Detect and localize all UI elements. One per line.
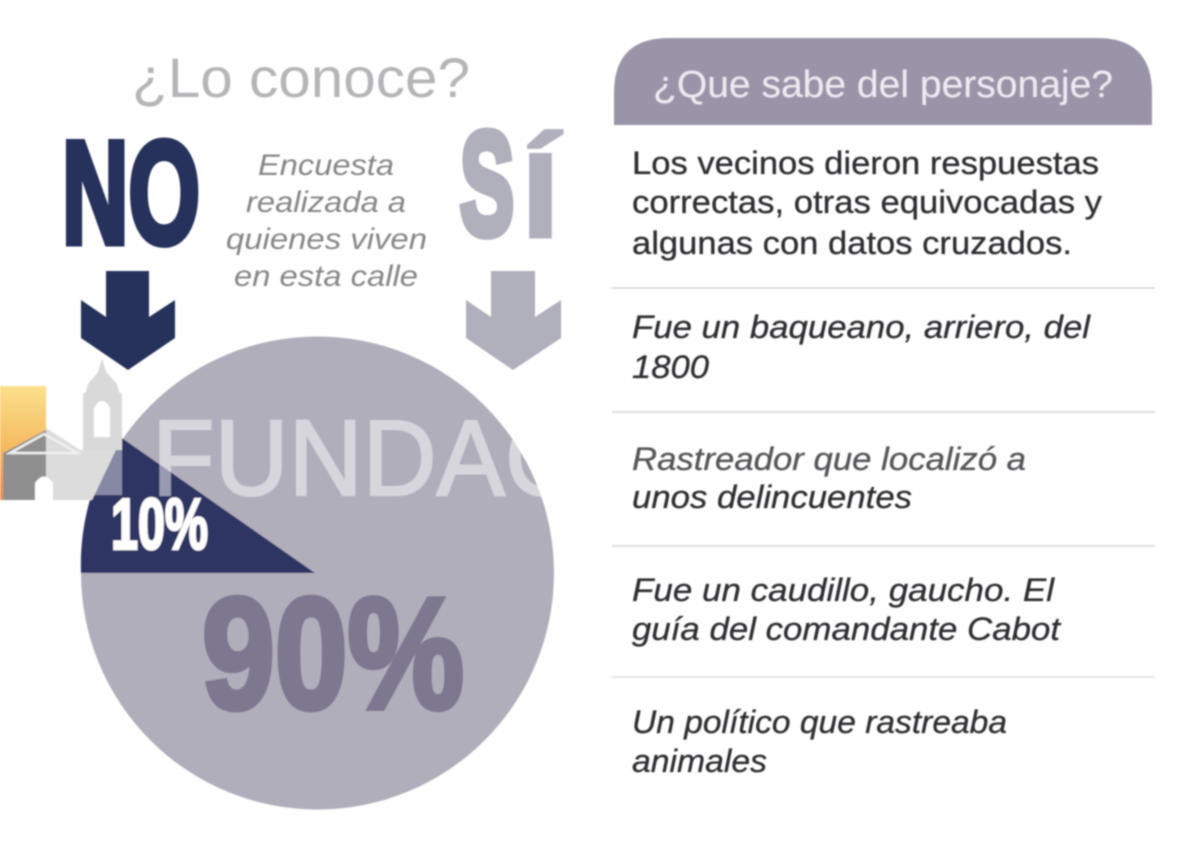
- logo wing over slice: [94, 450, 122, 495]
- logo roof line: [10, 434, 78, 453]
- answer 1: 1800: [632, 349, 709, 385]
- answer 3: [632, 572, 1061, 647]
- label: SÍ: S: [460, 102, 514, 265]
- pie chart: [81, 336, 554, 810]
- survey note: [226, 149, 427, 293]
- answer 4: Un político que rastreaba: [632, 704, 1007, 740]
- intro text: [632, 145, 1102, 261]
- logo tower: [83, 358, 122, 450]
- intro text: correctas, otras equivocadas y: [632, 184, 1102, 220]
- value: 90%: 90%: [202, 566, 464, 742]
- arrow: NO: [81, 271, 175, 370]
- arrow: SÍ: [466, 271, 561, 370]
- pie slice: 10%: [81, 436, 315, 573]
- intro text: Los vecinos dieron respuestas: [632, 145, 1099, 181]
- survey note: quienes viven: [226, 223, 427, 256]
- answer 2: unos delincuentes: [632, 479, 912, 515]
- answer 1: [632, 309, 1091, 385]
- survey panel: [0, 46, 579, 810]
- answer 3: Fue un caudillo, gaucho. El: [632, 572, 1055, 608]
- logo church wing: [46, 428, 116, 500]
- answer 4: [632, 704, 1007, 779]
- answer 2: Rastreador que localizó a: [632, 441, 1026, 477]
- logo window: [94, 401, 110, 437]
- pie slice: 90%: [81, 336, 554, 810]
- watermark: church logo: [0, 358, 122, 500]
- label: NO: NO: [62, 111, 200, 274]
- panel: answers: [612, 38, 1155, 779]
- value: 10%: 10%: [111, 485, 208, 565]
- answer 4: animales: [632, 743, 767, 779]
- title: ¿Lo conoce?: [132, 46, 470, 109]
- panel heading: ¿Que sabe del personaje?: [653, 64, 1113, 106]
- survey note: realizada a: [246, 186, 406, 219]
- survey note: en esta calle: [234, 260, 418, 293]
- answer 3: guía del comandante Cabot: [632, 611, 1061, 647]
- logo door: [35, 476, 53, 500]
- survey note: Encuesta: [258, 149, 394, 182]
- logo sunset: [0, 386, 46, 500]
- watermark: text: FUNDAC: [152, 397, 579, 518]
- answer 2: [632, 441, 1026, 515]
- intro text: algunas con datos cruzados.: [632, 225, 1072, 261]
- answer 1: Fue un baqueano, arriero, del: [632, 309, 1091, 345]
- logo church body: [3, 430, 46, 500]
- label: SÍ: Í: [522, 129, 562, 263]
- panel header: [614, 38, 1152, 125]
